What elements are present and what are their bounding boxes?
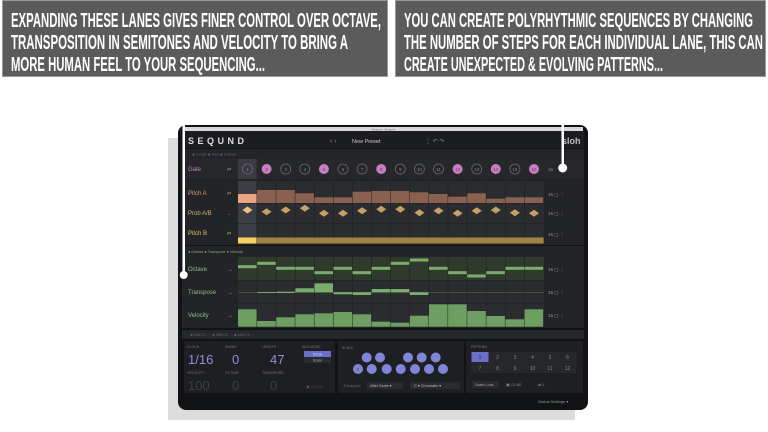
bottom panel: clock etc: LENGTH xyxy=(262,345,277,349)
pitch B row xyxy=(188,231,564,244)
bottom panel: clock etc: CLOCK xyxy=(187,345,200,349)
transpose row: Transpose xyxy=(188,290,217,296)
bottom panel: scale xyxy=(338,341,464,393)
gate row xyxy=(182,159,584,179)
bottom panel: clock etc: 0 xyxy=(270,378,277,393)
gate row: 10 xyxy=(417,167,422,172)
gate row: Gate xyxy=(188,167,202,173)
gate row: 14 xyxy=(493,167,499,172)
prob A/B row: Prob A/B xyxy=(188,211,212,217)
transpose row xyxy=(188,283,564,296)
bottom panel: pattern: ▣ C0-B0 xyxy=(506,383,521,387)
header bar: ‹ › xyxy=(330,138,337,145)
pitch section panel xyxy=(182,149,584,245)
bottom panel: pattern: Scale Lock xyxy=(475,383,494,387)
prob A/B row: ← xyxy=(227,211,232,217)
bottom panel: scale: After Scale ▾ xyxy=(370,384,392,388)
bottom panel: pattern xyxy=(466,341,583,393)
bottom panel: pattern: 3 xyxy=(514,355,517,361)
global settings: Global Settings ▾ xyxy=(538,399,568,404)
gate row: 16 xyxy=(531,167,537,172)
pitch A row: 16 ▢ ⋮ xyxy=(548,192,564,197)
modulation section xyxy=(182,246,584,328)
bottom panel: clock etc: SWING xyxy=(225,345,237,349)
midi cc bar xyxy=(182,330,584,339)
header bar: SEQUND xyxy=(188,136,248,146)
bottom panel: clock etc: ▣ C1-C3 xyxy=(306,384,323,389)
bottom panel: pattern: PATTERN xyxy=(471,345,487,349)
bottom panel: scale: SCALE xyxy=(342,346,354,350)
bottom panel: clock etc: 1/16 xyxy=(188,352,213,367)
gate row: 4 xyxy=(304,167,307,172)
bottom panel: clock etc: VELOCITY xyxy=(187,371,205,375)
octave row: → xyxy=(227,267,233,273)
pitch B row: ⇄ xyxy=(227,231,231,237)
gate row: 9 xyxy=(399,167,402,172)
bottom panel: pattern: 9 xyxy=(514,366,517,372)
octave row: 16 ▢ ⋮ xyxy=(548,267,564,272)
velocity row: 16 ▢ ⋮ xyxy=(548,313,564,318)
device frame: ◉ Midi CC ··· ◉ Midi CC ··· ◉ Midi CC ··· xyxy=(190,333,255,337)
bottom panel: pattern: 2 xyxy=(496,355,499,361)
header bar: sloh xyxy=(562,136,581,146)
bottom panel: clock etc: 0 xyxy=(232,352,239,367)
prob A/B row: 16 ▢ ⋮ xyxy=(548,211,564,216)
gate row: 1 xyxy=(246,167,249,172)
bottom panel: pattern: 8 xyxy=(496,366,499,372)
header bar: New Preset xyxy=(352,139,381,145)
bottom panel: clock etc: Scale xyxy=(313,358,322,362)
pitch A row: ⇄ xyxy=(227,191,231,197)
callout: right xyxy=(395,0,766,77)
gate row: 3 xyxy=(284,167,287,172)
pitch B row: Pitch B xyxy=(188,231,207,237)
prob A/B row xyxy=(188,205,564,217)
bottom panel: pattern: 5 xyxy=(549,355,552,361)
transpose row: 16 ▢ ⋮ xyxy=(548,290,564,295)
octave row: Octave xyxy=(188,267,208,273)
gate row: 8 xyxy=(380,167,383,172)
bottom panel: clock etc: 0 xyxy=(232,378,239,393)
bottom panel: pattern: 10 xyxy=(530,366,535,372)
gate row: 16 xyxy=(548,167,554,172)
bottom panel: clock etc: 100 xyxy=(188,378,210,393)
gate row: 11 xyxy=(436,167,441,172)
octave row xyxy=(188,258,564,278)
grid cells pitch xyxy=(238,181,544,244)
gate row: ⇄ xyxy=(227,167,231,173)
device frame xyxy=(178,125,588,410)
pitch B row: 16 ▢ ⋮ xyxy=(548,232,564,237)
device frame: ◉ Length ◉ Hold ◉ Chance xyxy=(192,152,236,156)
pitch A row xyxy=(188,190,564,203)
gate row: 5 xyxy=(323,167,326,172)
bottom panel: clock etc: 47 xyxy=(270,352,284,367)
shadow xyxy=(168,138,575,420)
bottom panel: clock etc: TRANSPOSE xyxy=(262,371,284,375)
gate row: 13 xyxy=(474,167,480,172)
gate row: 15 xyxy=(512,167,518,172)
bottom panel: scale: C xyxy=(357,366,360,372)
bottom panel: pattern: 11 xyxy=(547,366,553,372)
bottom panel: pattern: 1 xyxy=(479,355,482,361)
bottom panel: clock etc: ADV MODE xyxy=(302,345,321,349)
bottom panel: pattern: 6 xyxy=(566,355,569,361)
gate row: 7 xyxy=(361,167,364,172)
bottom panel: clock etc xyxy=(184,341,335,393)
bottom panel: pattern: ⇄ 1 xyxy=(538,382,544,387)
bottom panel: pattern: 4 xyxy=(531,355,534,361)
device frame: Seqund - Seqund xyxy=(371,128,395,132)
pitch A row: Pitch A xyxy=(188,191,207,197)
velocity row xyxy=(188,304,564,327)
device frame: ● Octave ● Transpose ● Velocity xyxy=(188,250,243,254)
velocity row: Velocity xyxy=(188,313,209,319)
pointer line: right xyxy=(558,122,567,172)
transpose row: → xyxy=(227,290,233,296)
pointer line: left xyxy=(180,124,188,279)
bottom panel: pattern: 7 xyxy=(479,366,482,372)
bottom panel: clock etc: OCTAVE xyxy=(225,371,240,375)
callout: left xyxy=(2,0,388,77)
bottom panel: scale: Transpose xyxy=(343,384,361,388)
bottom panel: scale: C ▾ Chromatic ▾ xyxy=(414,384,441,388)
bottom panel: pattern: 12 xyxy=(565,366,570,372)
gate row: 6 xyxy=(342,167,345,172)
gate row: 12 xyxy=(455,167,461,172)
header bar: ⋮ ↶ ↷ xyxy=(425,138,444,145)
gate row: 2 xyxy=(265,167,268,172)
header bar xyxy=(182,131,584,148)
bottom panel: clock etc: Clock xyxy=(313,352,322,356)
velocity row: → xyxy=(227,313,233,319)
